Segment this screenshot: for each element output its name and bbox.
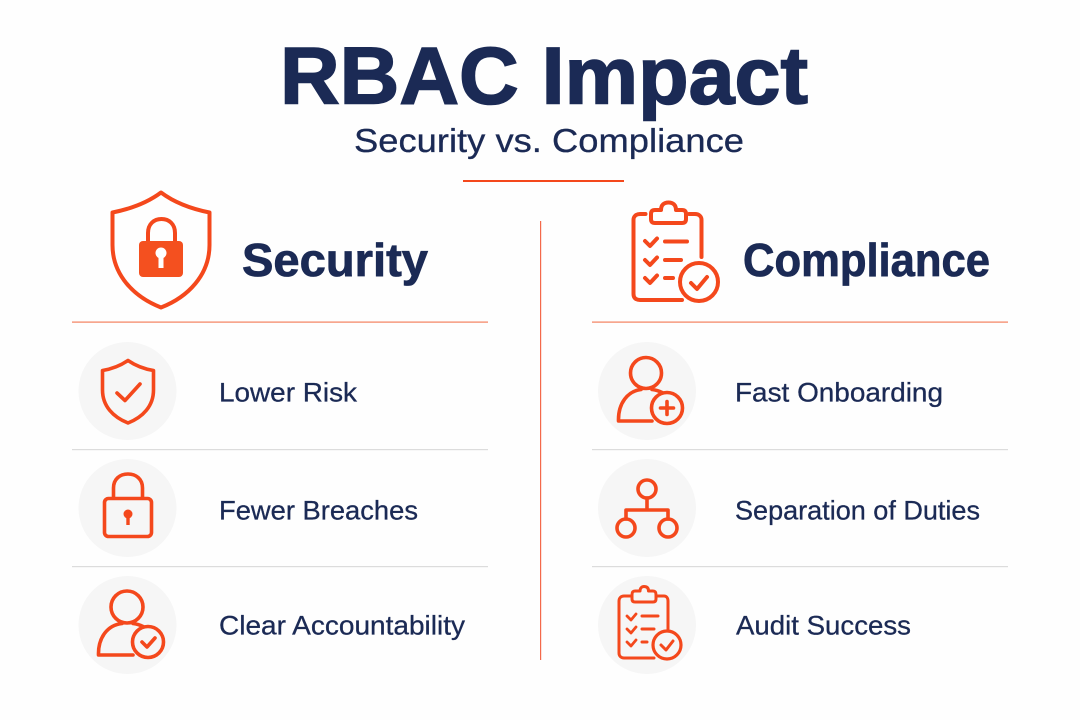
icon: shield with lock: [112, 192, 210, 308]
panel: security: [72, 192, 488, 674]
row: fewer breaches: [78, 459, 418, 557]
title: RBAC Impact: [280, 32, 808, 122]
row: fast onboarding: [598, 342, 943, 440]
row: audit success: [598, 576, 911, 674]
heading: security: Security: [242, 234, 428, 286]
row: lower risk: [78, 342, 358, 440]
heading: compliance: Compliance: [743, 234, 990, 286]
subtitle: Security vs. Compliance: [354, 122, 744, 159]
row: fast onboarding: Fast Onboarding: [735, 378, 943, 408]
row: separation of duties: [598, 459, 980, 557]
row: audit success: Audit Success: [736, 610, 911, 640]
panel: compliance: [592, 202, 1008, 674]
row: clear accountability: Clear Accountability: [219, 610, 466, 640]
row: fewer breaches: Fewer Breaches: [219, 496, 418, 526]
row: clear accountability: [78, 576, 466, 674]
row: separation of duties: Separation of Duties: [735, 496, 980, 526]
row: lower risk: Lower Risk: [219, 378, 358, 408]
icon: clipboard with check: [634, 202, 718, 301]
